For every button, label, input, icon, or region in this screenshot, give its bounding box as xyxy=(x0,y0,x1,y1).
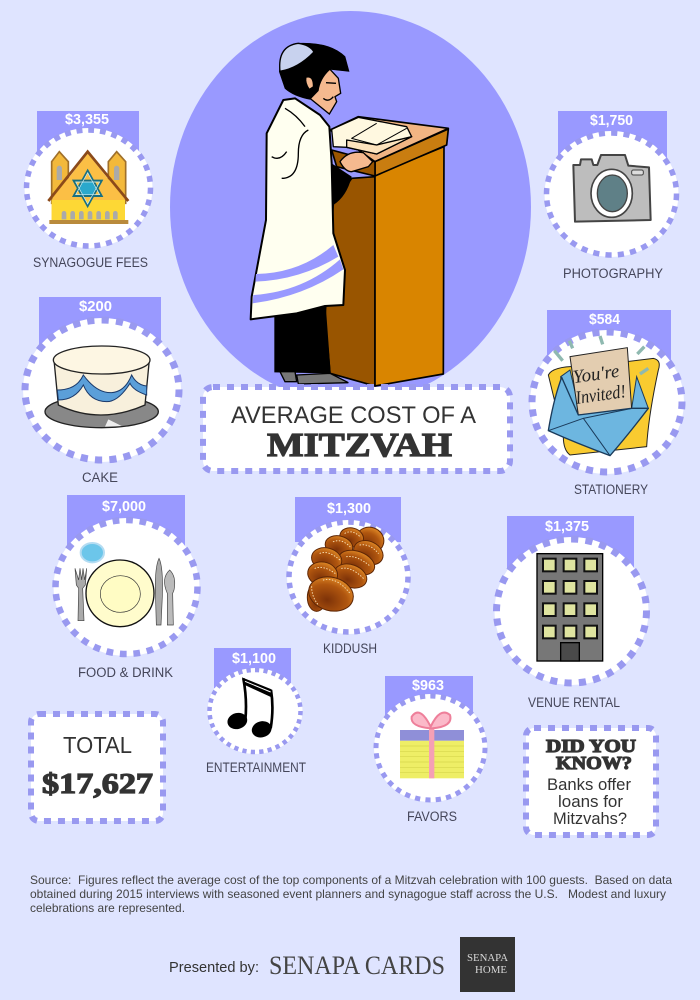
open book xyxy=(332,117,412,154)
total value: $17,627 xyxy=(42,769,153,800)
item: favors xyxy=(374,676,487,824)
icon: place setting xyxy=(75,543,175,627)
item: stationery xyxy=(530,310,684,497)
back of hair xyxy=(280,70,317,99)
icon: invitation envelope: Invited! xyxy=(573,381,627,409)
item: kiddush xyxy=(287,497,410,656)
label: FAVORS xyxy=(407,809,457,824)
label: FOOD & DRINK xyxy=(78,665,173,680)
central purple oval xyxy=(170,11,531,403)
hand xyxy=(340,152,373,172)
amount: $963 xyxy=(412,678,444,694)
did you know body: Banks offer xyxy=(547,775,631,794)
arm shadow xyxy=(332,163,352,205)
shawl fold lines xyxy=(272,108,308,178)
footer: Senapa Home badge: HOME xyxy=(475,965,507,976)
title line 1: AVERAGE COST OF A xyxy=(231,402,476,429)
icon: invitation envelope: You're xyxy=(572,361,621,388)
footer: Senapa Cards logo: SENAPA CARDS xyxy=(269,951,445,980)
icon: music notes xyxy=(226,677,273,740)
icon: challah bread xyxy=(305,523,387,616)
total label: TOTAL xyxy=(63,732,132,758)
amount: $1,750 xyxy=(590,113,633,129)
label: SYNAGOGUE FEES xyxy=(33,255,148,270)
did you know body line 2: loans for xyxy=(558,792,623,811)
source note: celebrations are represented. xyxy=(30,901,185,915)
label: STATIONERY xyxy=(574,482,648,497)
icon: building xyxy=(537,554,603,661)
item: venue rental xyxy=(494,516,648,710)
amount: $584 xyxy=(589,312,620,328)
podium xyxy=(325,117,448,386)
illustration: man reading at podium xyxy=(251,43,448,386)
smile and eye xyxy=(323,83,336,100)
source note xyxy=(30,873,672,915)
item: photography xyxy=(544,111,678,281)
icon: gift box xyxy=(400,713,464,778)
amount: $200 xyxy=(79,299,112,315)
panel: did you know xyxy=(526,728,656,835)
panel: total xyxy=(31,714,163,821)
amount: $7,000 xyxy=(102,499,146,515)
legs and shoes xyxy=(275,305,348,384)
footer: presented by: Presented by: xyxy=(169,959,259,976)
did you know heading line 2: KNOW? xyxy=(556,753,632,773)
amount: $3,355 xyxy=(65,112,109,128)
shawl stripes xyxy=(253,245,343,303)
icon: synagogue xyxy=(48,152,128,224)
source note: Source: Figures reflect the average cost of the top components of a Mitzvah celebration with 100 guests. Based on data xyxy=(30,873,672,887)
amount: $1,375 xyxy=(545,519,589,535)
label: KIDDUSH xyxy=(323,641,377,656)
amount: $1,100 xyxy=(232,651,276,667)
icon: camera xyxy=(573,155,651,222)
item: entertainment xyxy=(206,648,306,775)
hair xyxy=(279,43,349,99)
icon: cake xyxy=(45,346,158,428)
kippah xyxy=(280,43,314,71)
label: ENTERTAINMENT xyxy=(206,760,306,775)
amount: $1,300 xyxy=(327,501,371,517)
did you know body line 3: Mitzvahs? xyxy=(553,809,627,828)
icon: invitation envelope xyxy=(548,336,659,456)
label: CAKE xyxy=(82,470,118,485)
source note: obtained during 2015 interviews with seasoned event planners and synagogue staff across the U.S. Modest and luxury xyxy=(30,887,666,901)
did you know heading: DID YOU xyxy=(546,736,636,756)
footer: Senapa Home badge xyxy=(460,937,515,992)
footer: Senapa Home badge: SENAPA xyxy=(467,953,509,964)
item: food and drink xyxy=(54,495,200,680)
face xyxy=(305,69,341,114)
title panel xyxy=(203,387,510,471)
label: VENUE RENTAL xyxy=(528,695,620,710)
title line 2: MITZVAH xyxy=(267,427,452,464)
prayer shawl xyxy=(251,98,345,319)
item: synagogue fees xyxy=(24,111,152,270)
item: cake xyxy=(23,297,181,485)
label: PHOTOGRAPHY xyxy=(563,266,663,281)
ear xyxy=(306,77,313,89)
